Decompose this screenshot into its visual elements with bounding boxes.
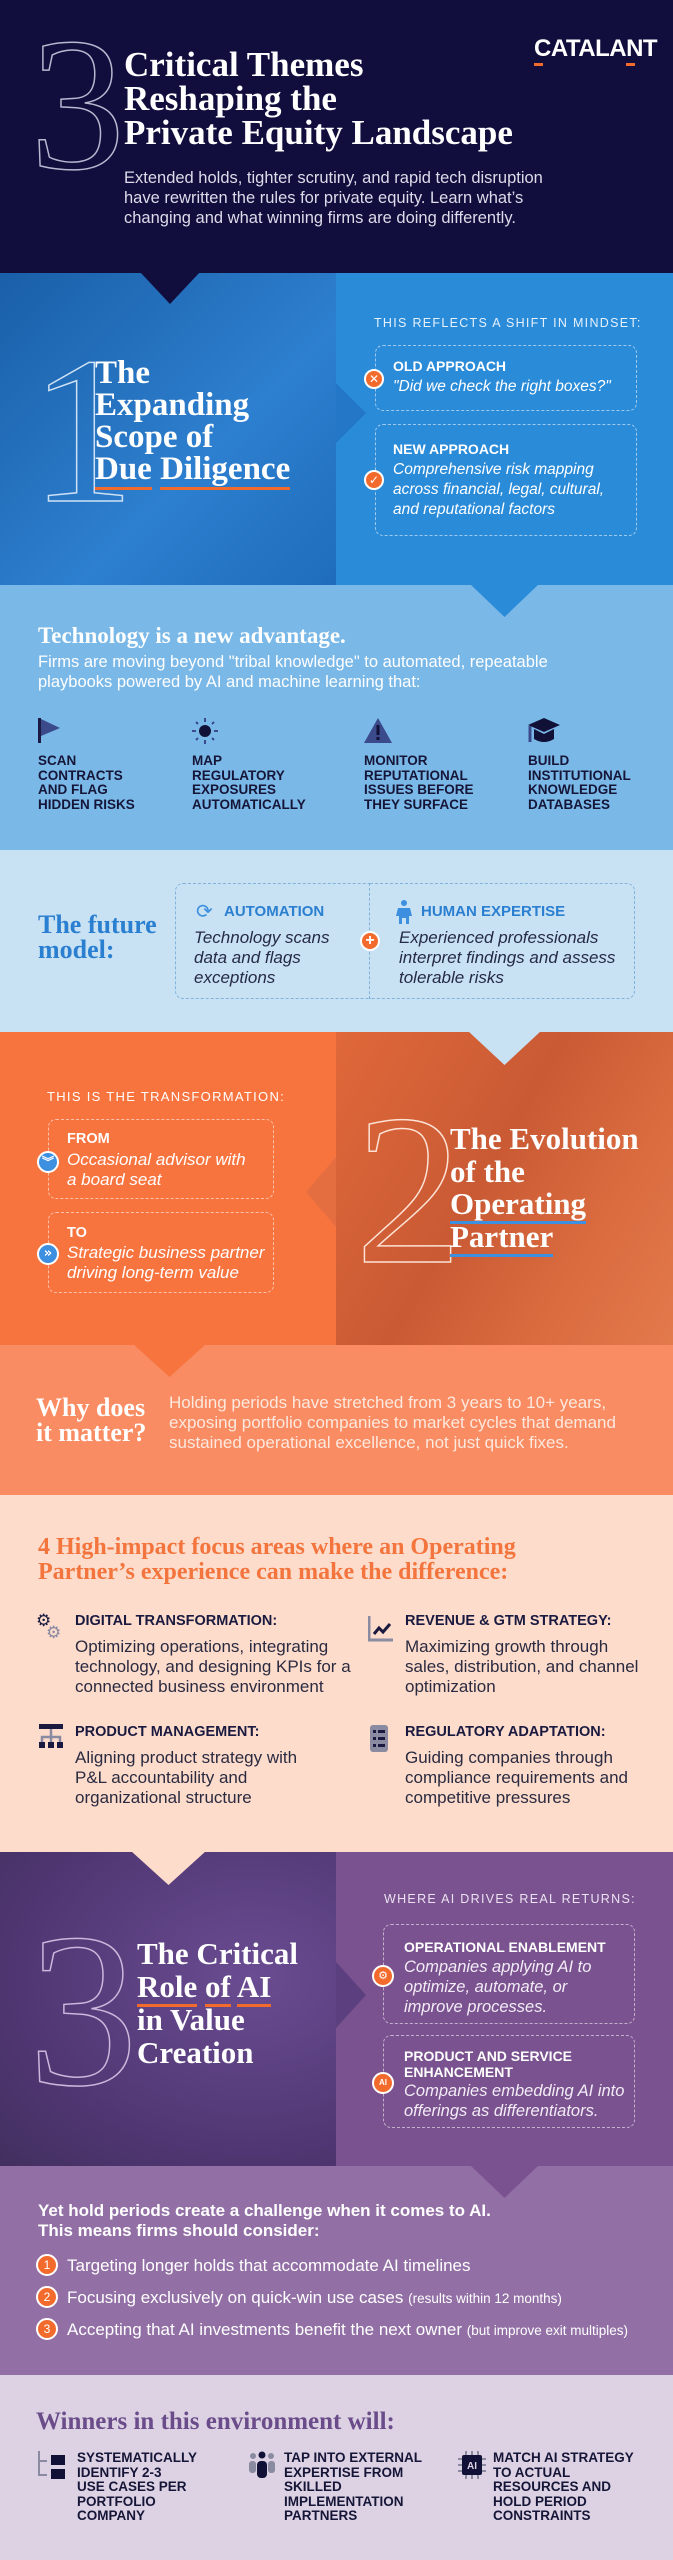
title — [124, 45, 513, 152]
box: product and service enhancement: PRODUCT AND SERVICE — [404, 2048, 572, 2064]
box: operational enablement: improve processes. — [404, 1998, 547, 2016]
box: operational enablement: optimize, automate, or — [404, 1978, 567, 1996]
section: operating partner — [0, 1032, 673, 1345]
item: scan: CONTRACTS — [38, 768, 123, 782]
box: old approach: "Did we check the right boxes?" — [393, 378, 611, 395]
item: product management: organizational structure — [75, 1788, 252, 1807]
heading: The Critical — [137, 1936, 298, 1971]
logo: CATALANT — [534, 35, 657, 62]
heading: The Evolution — [450, 1121, 639, 1156]
label: THIS IS THE TRANSFORMATION: — [47, 1089, 285, 1104]
item: build — [528, 718, 631, 812]
item: regulatory: competitive pressures — [405, 1788, 570, 1807]
text: playbooks powered by AI and machine learning that: — [38, 673, 420, 691]
section: technology — [0, 585, 673, 850]
item 1: COMPANY — [77, 2508, 145, 2523]
subtitle: Extended holds, tighter scrutiny, and rapid tech disruption — [124, 169, 543, 187]
item: regulatory: REGULATORY ADAPTATION: — [405, 1724, 606, 1740]
heading: Yet hold periods create a challenge when it comes to AI. — [38, 2201, 491, 2220]
item 2: Focusing exclusively on quick-win use cases (results within 12 months) — [67, 2288, 562, 2307]
item: digital transformation: DIGITAL TRANSFORMATION: — [75, 1613, 277, 1629]
icon: down chevrons: ︾ — [42, 1155, 54, 1169]
box: product and service enhancement — [383, 2035, 635, 2128]
heading — [137, 1936, 298, 2070]
text: Holding periods have stretched from 3 years to 10+ years, — [169, 1393, 606, 1412]
item: monitor: THEY SURFACE — [364, 796, 468, 812]
photo panel — [0, 1852, 336, 2166]
item 1: SYSTEMATICALLY — [77, 2450, 197, 2465]
heading — [36, 1393, 146, 1447]
text: Firms are moving beyond "tribal knowledge" to automated, repeatable — [38, 653, 548, 671]
box: new approach: NEW APPROACH — [393, 441, 509, 457]
icon: grad cap — [528, 718, 560, 742]
icon: x: ✕ — [369, 372, 379, 386]
icon: checklist — [370, 1725, 388, 1752]
item: build: BUILD — [528, 753, 569, 768]
section: due diligence — [0, 273, 673, 585]
item 3: RESOURCES AND — [493, 2479, 611, 2494]
heading: model: — [38, 935, 115, 964]
item: product management: Aligning product strategy with — [75, 1748, 297, 1767]
icon: gear: ⚙ — [378, 1969, 388, 1982]
icon: sun — [192, 718, 218, 744]
item 1: Targeting longer holds that accommodate AI timelines — [67, 2256, 471, 2275]
box: from: FROM — [67, 1131, 110, 1147]
text: exposing portfolio companies to market cycles that demand — [169, 1413, 616, 1432]
title: Critical Themes — [124, 45, 363, 84]
box: automation: exceptions — [194, 968, 275, 987]
icon: plus: + — [365, 932, 375, 949]
box: automation — [175, 883, 370, 999]
icon: chart — [368, 1616, 393, 1642]
item 2: 2 — [44, 2290, 50, 2304]
item: revenue: sales, distribution, and channel — [405, 1657, 638, 1676]
item 2: SKILLED — [284, 2479, 342, 2494]
item: revenue: REVENUE & GTM STRATEGY: — [405, 1613, 612, 1629]
heading: in Value — [137, 2002, 245, 2037]
item: scan — [38, 718, 135, 812]
section: future model — [0, 850, 673, 1032]
box: to: Strategic business partner — [67, 1243, 264, 1262]
heading — [38, 910, 157, 964]
subtitle — [124, 169, 543, 227]
section: role of AI — [0, 1852, 673, 2166]
item: monitor: ISSUES BEFORE — [364, 782, 474, 797]
item: monitor: MONITOR — [364, 753, 428, 768]
icon: AI chip: AI — [467, 2461, 477, 2472]
box: from — [48, 1119, 274, 1199]
photo panel — [336, 1032, 673, 1345]
item 1 — [38, 2450, 197, 2523]
item: scan: AND FLAG — [38, 782, 108, 797]
item: digital transformation: Optimizing operations, integrating — [75, 1637, 328, 1656]
icon: AI chip — [458, 2451, 486, 2479]
box: product and service enhancement: ENHANCEMENT — [404, 2064, 513, 2080]
icon: gears: ⚙ — [36, 1611, 51, 1631]
icon: flag — [38, 718, 60, 743]
box: old approach: OLD APPROACH — [393, 358, 506, 374]
box: human expertise: tolerable risks — [399, 968, 504, 987]
item: digital transformation — [36, 1611, 351, 1696]
item: product management: P&L accountability and — [75, 1768, 247, 1787]
icon: down chevrons — [37, 1151, 59, 1173]
title: Private Equity Landscape — [124, 113, 513, 152]
box: new approach: and reputational factors — [393, 501, 555, 518]
photo panel — [0, 273, 336, 585]
icon: gear — [372, 1965, 394, 1987]
item: regulatory: Guiding companies through — [405, 1748, 613, 1767]
icon: gears — [36, 1611, 61, 1643]
item: build: KNOWLEDGE — [528, 782, 617, 797]
box: automation: data and flags — [194, 948, 301, 967]
heading: Creation — [137, 2035, 254, 2070]
item: map: MAP — [192, 753, 222, 768]
box: from: a board seat — [67, 1170, 162, 1189]
item: digital transformation: connected business environment — [75, 1677, 324, 1696]
heading: Scope of — [95, 419, 213, 455]
box: new approach: Comprehensive risk mapping — [393, 461, 594, 478]
box: human expertise: Experienced professionals — [399, 928, 598, 947]
box: human expertise — [370, 883, 635, 999]
item 2: IMPLEMENTATION — [284, 2494, 404, 2508]
item 1: PORTFOLIO — [77, 2494, 156, 2508]
icon: AI chip — [372, 2072, 394, 2094]
box: to: TO — [67, 1225, 87, 1241]
box: automation: Technology scans — [194, 928, 329, 947]
section: focus areas — [0, 1495, 673, 1852]
icon: refresh: ⟳ — [196, 899, 213, 923]
box: operational enablement: Companies applying AI to — [404, 1958, 591, 1976]
box: old approach — [375, 345, 637, 411]
item: product management: PRODUCT MANAGEMENT: — [75, 1724, 259, 1740]
icon: check: ✓ — [369, 473, 379, 487]
item: map: REGULATORY — [192, 768, 285, 782]
heading: Expanding — [95, 387, 249, 423]
heading: of the — [450, 1154, 525, 1188]
section: challenge — [0, 2166, 673, 2375]
item 2: EXPERTISE FROM — [284, 2464, 403, 2480]
text — [169, 1393, 616, 1452]
icon: hierarchy — [39, 1724, 63, 1748]
item 1: IDENTIFY 2-3 — [77, 2464, 162, 2480]
heading — [38, 1534, 516, 1585]
item 2: TAP INTO EXTERNAL — [284, 2450, 422, 2465]
item: revenue — [368, 1613, 638, 1696]
item 3: 3 — [44, 2322, 50, 2336]
item 3: HOLD PERIOD — [493, 2494, 587, 2508]
item 3: TO ACTUAL — [493, 2464, 570, 2480]
label: WHERE AI DRIVES REAL RETURNS: — [384, 1892, 636, 1906]
heading: Due Diligence — [95, 451, 290, 487]
list — [36, 2254, 628, 2340]
heading: 4 High-impact focus areas where an Operating — [38, 1534, 516, 1560]
item 3: MATCH AI STRATEGY — [493, 2450, 634, 2465]
heading — [95, 355, 290, 490]
subtitle: have rewritten the rules for private equity. Learn what’s — [124, 189, 523, 207]
box: product and service enhancement: offerings as differentiators. — [404, 2102, 598, 2120]
heading — [450, 1121, 639, 1257]
heading: Technology is a new advantage. — [38, 623, 346, 648]
icon: right chevrons: » — [44, 1246, 52, 1261]
item: digital transformation: ⚙ — [46, 1623, 61, 1643]
heading: Winners in this environment will: — [36, 2408, 395, 2435]
box: operational enablement: OPERATIONAL ENABLEMENT — [404, 1939, 606, 1955]
icon: people — [249, 2451, 275, 2479]
item: revenue: optimization — [405, 1677, 496, 1696]
item: digital transformation: technology, and designing KPIs for a — [75, 1657, 351, 1676]
item: build: DATABASES — [528, 796, 610, 812]
heading: Why does — [36, 1393, 145, 1422]
label: THIS REFLECTS A SHIFT IN MINDSET: — [374, 316, 642, 330]
item 2: PARTNERS — [284, 2508, 357, 2523]
icon: x — [364, 369, 384, 389]
item: monitor — [364, 718, 474, 812]
item: revenue: Maximizing growth through — [405, 1637, 608, 1656]
icon: warning — [364, 718, 392, 743]
box: to: driving long-term value — [67, 1263, 239, 1282]
heading — [38, 2201, 491, 2240]
item: scan: SCAN — [38, 753, 76, 768]
box: human expertise: HUMAN EXPERTISE — [421, 903, 565, 920]
heading: Operating — [450, 1186, 586, 1221]
box: product and service enhancement: Companies embedding AI into — [404, 2082, 624, 2100]
heading: The future — [38, 910, 157, 939]
item: map: EXPOSURES — [192, 782, 276, 797]
text: sustained operational excellence, not just quick fixes. — [169, 1433, 569, 1452]
icon: person — [396, 900, 412, 924]
item: build: INSTITUTIONAL — [528, 768, 631, 782]
item 2 — [249, 2450, 422, 2523]
item: product management — [39, 1724, 297, 1807]
icon: check — [364, 470, 384, 490]
heading: Partner’s experience can make the difference: — [38, 1559, 508, 1585]
section: header — [0, 0, 673, 273]
icon: AI chip: AI — [379, 2078, 387, 2087]
item 3 — [458, 2451, 658, 2531]
box: automation: AUTOMATION — [224, 903, 324, 920]
box: to — [48, 1212, 274, 1293]
heading: The — [95, 355, 150, 391]
heading: it matter? — [36, 1418, 146, 1447]
heading: Role of AI — [137, 1969, 271, 2004]
item 3: Accepting that AI investments benefit the next owner (but improve exit multiples) — [67, 2320, 628, 2339]
item: monitor: REPUTATIONAL — [364, 768, 468, 782]
item: map — [192, 718, 306, 812]
heading: This means firms should consider: — [38, 2221, 320, 2240]
box: human expertise: interpret findings and assess — [399, 948, 615, 967]
text — [38, 653, 548, 691]
item 1: USE CASES PER — [77, 2479, 187, 2494]
item: map: AUTOMATICALLY — [192, 796, 306, 812]
item: scan: HIDDEN RISKS — [38, 796, 135, 812]
icon: right chevrons — [37, 1243, 59, 1265]
item 3: CONSTRAINTS — [493, 2508, 590, 2523]
heading: Partner — [450, 1218, 553, 1254]
icon: folders — [38, 2451, 65, 2479]
icon: plus — [360, 931, 380, 951]
item: regulatory — [370, 1724, 628, 1807]
section: why it matters — [0, 1345, 673, 1495]
title: Reshaping the — [124, 79, 337, 118]
box: from: Occasional advisor with — [67, 1150, 246, 1169]
item: regulatory: compliance requirements and — [405, 1768, 628, 1787]
section: winners — [0, 2375, 673, 2560]
item 1: 1 — [44, 2258, 50, 2272]
subtitle: changing and what winning firms are doing differently. — [124, 209, 516, 227]
box: new approach: across financial, legal, cultural, — [393, 481, 604, 498]
box: new approach — [375, 424, 637, 536]
box: operational enablement — [383, 1924, 635, 2024]
